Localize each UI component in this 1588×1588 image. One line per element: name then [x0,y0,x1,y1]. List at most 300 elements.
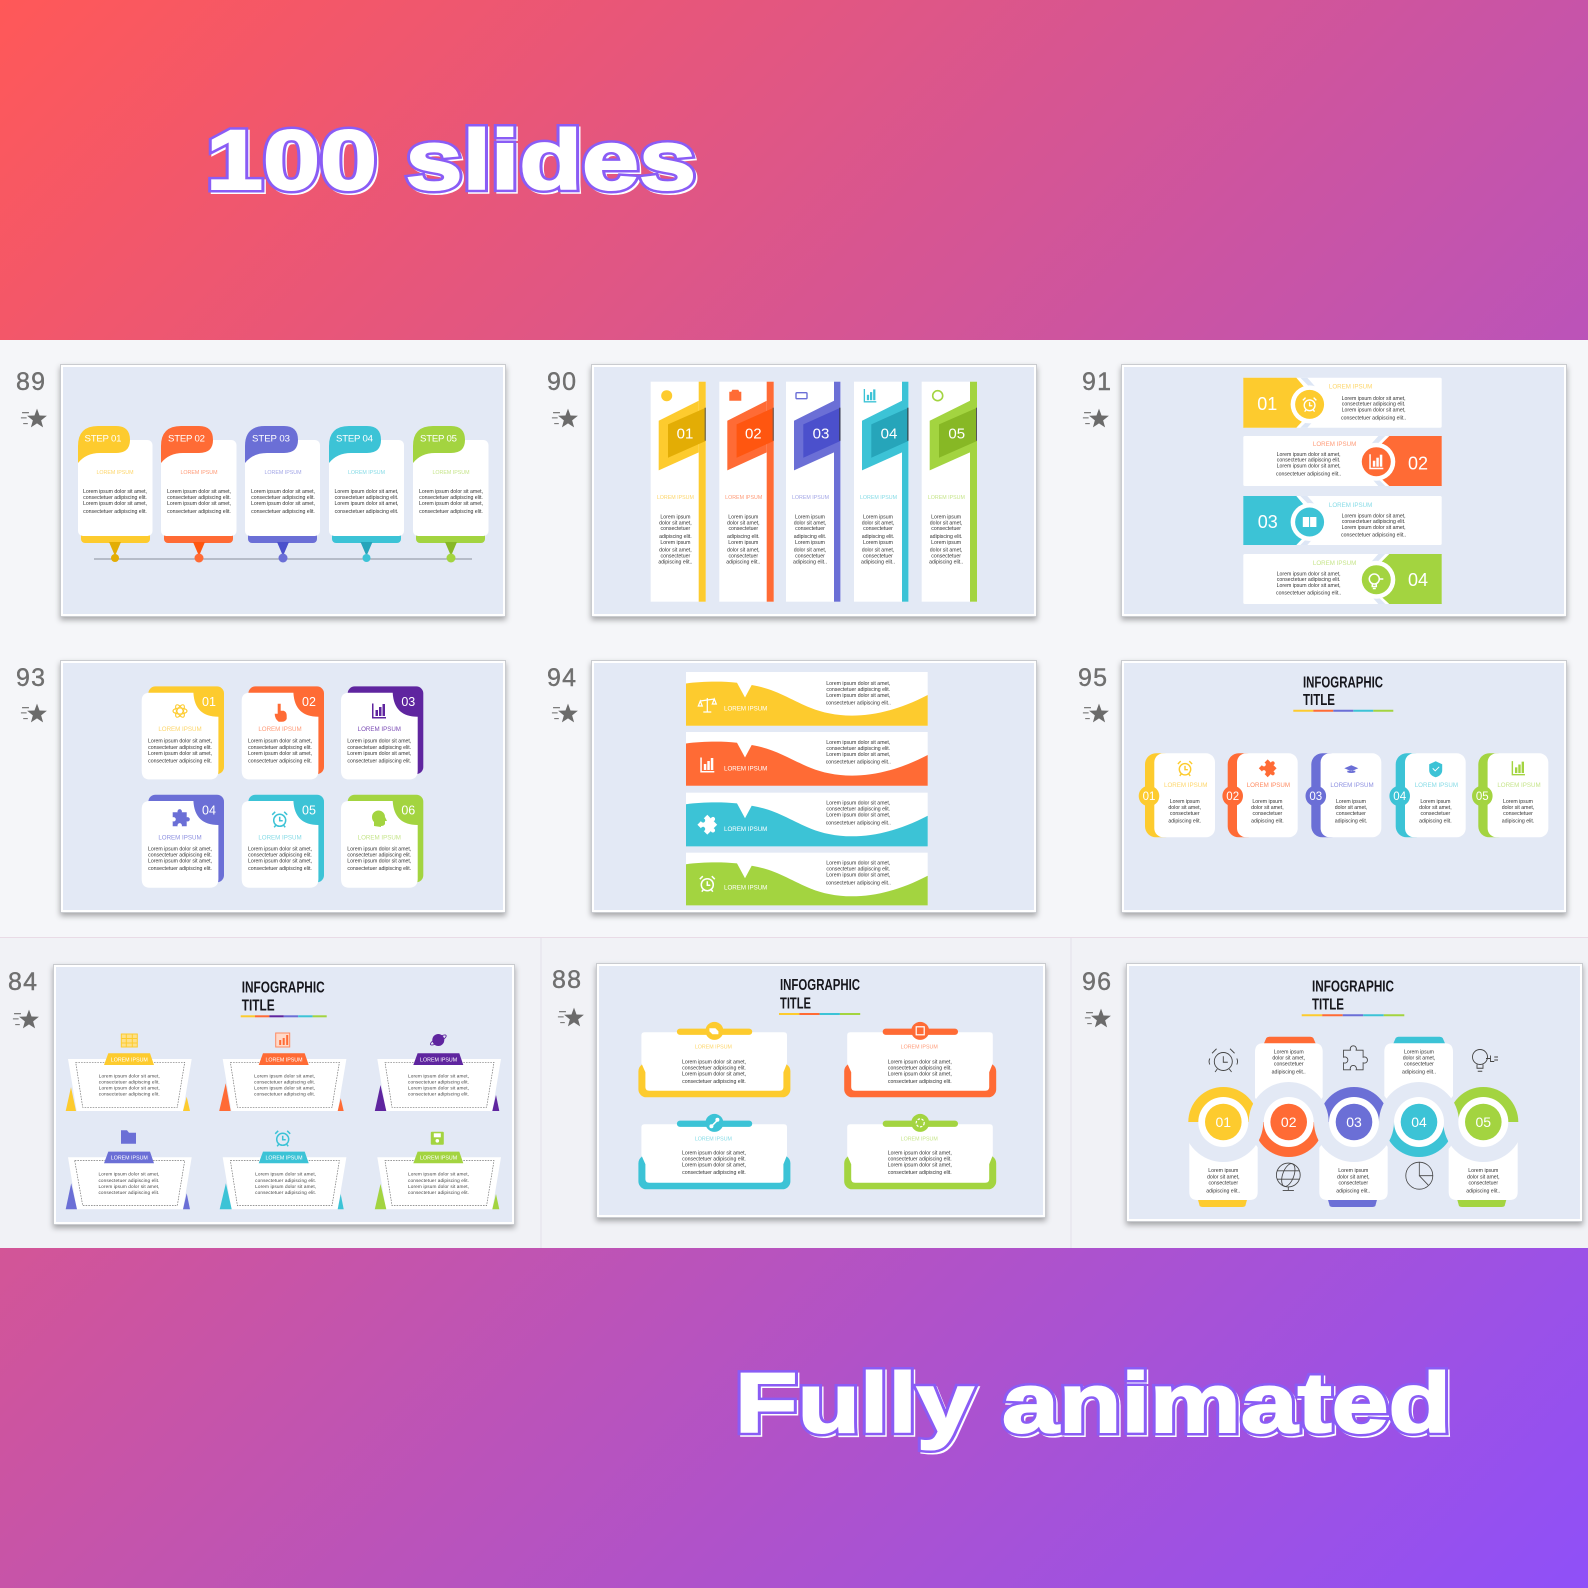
banner teal: consectetuer adipiscing elit. [826,807,890,813]
card violet: consectetuer adipiscing elit. [98,1178,160,1183]
banner green: consectetuer adipiscing elit. [826,867,890,873]
column 01: Lorem ipsum [660,540,690,546]
card: step 01: consectetuer adipiscing elit. [83,509,147,515]
icon: alarm clock [1209,1049,1238,1072]
card violet: Lorem ipsum dolor sit amet, [98,1172,160,1177]
card 02: 02 [1226,791,1239,803]
column 02 [719,382,774,602]
card 05 [242,795,324,888]
card 04: consectetuer adipiscing elit. [148,866,212,872]
text block 02: consectetuer [1274,1062,1304,1068]
card 02 [242,686,324,779]
column 04: 04 [881,425,897,442]
column 01: consectetuer [661,554,691,560]
card green: Lorem ipsum dolor sit amet, [888,1150,952,1156]
column 02: adipiscing elit.. [726,560,760,566]
card: step 02 [161,426,236,562]
card: step 01: consectetuer adipiscing elit. [83,495,147,501]
card 04: Lorem ipsum [1420,799,1450,805]
card 01: dolor sit amet, [1168,805,1201,811]
card: step 04: Lorem ipsum dolor sit amet, [334,489,399,495]
row 03: Lorem ipsum dolor sit amet, [1342,525,1406,531]
row 03: LOREM IPSUM [1329,502,1372,509]
panel: slide 89 timeline steps [60,364,506,617]
card yellow: Lorem ipsum dolor sit amet, [99,1086,160,1091]
column 05: adipiscing elit.. [929,560,963,566]
card 04: LOREM IPSUM [1415,782,1458,789]
column 03: Lorem ipsum [795,540,825,546]
banner teal: LOREM IPSUM [724,826,767,833]
column 04: adipiscing elit.. [861,560,895,566]
card: step 05: Lorem ipsum dolor sit amet, [419,489,483,495]
slide number 96 with star [1082,968,1112,1027]
icon: pie chart [1406,1162,1433,1189]
banner teal: Lorem ipsum dolor sit amet, [826,801,890,807]
card green: Lorem ipsum dolor sit amet, [408,1172,469,1177]
banner orange: LOREM IPSUM [724,765,767,772]
card 04: Lorem ipsum dolor sit amet, [148,858,212,864]
card 02: consectetuer adipiscing elit. [248,759,312,765]
column 02: Lorem ipsum [728,514,758,520]
card: step 01: Lorem ipsum dolor sit amet, [83,501,147,507]
banner teal: consectetuer adipiscing elit.. [826,820,891,826]
card: step 01 [78,426,152,562]
row 02: Lorem ipsum dolor sit amet, [1277,452,1341,458]
card orange: consectetuer adipiscing elit. [888,1079,952,1085]
card: step 05: consectetuer adipiscing elit. [419,495,483,501]
column 01: 01 [677,425,693,442]
card 01: consectetuer adipiscing elit. [148,759,212,765]
column 03 [786,382,840,602]
banner yellow: LOREM IPSUM [724,705,767,712]
card: step 03: LOREM IPSUM [264,470,302,476]
card 05: consectetuer [1503,811,1533,817]
card orange: consectetuer adipiscing elit. [254,1092,315,1097]
row 04: LOREM IPSUM [1313,560,1356,567]
card 03: LOREM IPSUM [1330,782,1374,789]
card green: consectetuer adipiscing elit. [888,1170,952,1176]
card 05: LOREM IPSUM [258,834,302,841]
slide number 91 with star [1082,368,1112,427]
card 04: 04 [1393,791,1407,803]
card: step 02: Lorem ipsum dolor sit amet, [167,489,231,495]
column 01: adipiscing elit.. [658,560,692,566]
card 01: Lorem ipsum [1170,799,1200,805]
column 05: dolor sit amet, [930,548,962,554]
card 06: Lorem ipsum dolor sit amet, [347,858,411,864]
card 05: 05 [302,803,316,817]
card yellow [66,1034,192,1111]
column 04: adipiscing elit. [862,534,894,540]
card yellow: consectetuer adipiscing elit. [682,1065,746,1071]
card 03: Lorem ipsum [1336,799,1366,805]
text block 03: consectetuer [1338,1180,1368,1186]
text block 02: Lorem ipsum [1274,1049,1304,1055]
card: step 02: STEP 02 [168,434,205,444]
card: step 04: LOREM IPSUM [348,470,385,476]
banner orange [686,732,928,786]
card orange: Lorem ipsum dolor sit amet, [254,1073,315,1078]
panel: slide 95 five numbered cards [1121,660,1567,913]
card: step 04 [329,426,404,562]
row 04: Lorem ipsum dolor sit amet, [1277,571,1341,577]
column 04: dolor sit amet, [862,520,894,526]
card 03: consectetuer [1336,811,1366,817]
column 02: consectetuer [728,526,758,532]
card 02: dolor sit amet, [1251,805,1284,811]
column 05: dolor sit amet, [930,520,962,526]
card 01: Lorem ipsum dolor sit amet, [148,751,212,757]
card violet: Lorem ipsum dolor sit amet, [98,1184,160,1189]
column 05: Lorem ipsum [931,514,961,520]
heading: 100 slides: 100 slides [208,115,698,209]
card 03: Lorem ipsum dolor sit amet, [347,739,411,745]
circle 03 [1329,1097,1379,1147]
row 03: 03 [1258,512,1278,532]
banner yellow: Lorem ipsum dolor sit amet, [826,693,890,699]
column 04: consectetuer [863,554,893,560]
card orange: consectetuer adipiscing elit. [888,1065,952,1071]
card 01 [142,686,224,779]
middle light background [0,340,1588,1248]
card 03 [341,686,423,779]
text block 05: dolor sit amet, [1467,1174,1500,1180]
slide number 95 with star [1078,664,1109,722]
heading: Fully animated: Fully animated [735,1356,1451,1450]
card 02: 02 [302,695,316,709]
row 04: Lorem ipsum dolor sit amet, [1277,583,1341,589]
column 01: Lorem ipsum [660,514,690,520]
card green: LOREM IPSUM [901,1136,938,1142]
row 02: Lorem ipsum dolor sit amet, [1277,464,1341,470]
title: INFOGRAPHIC [780,977,860,994]
card green: consectetuer adipiscing elit. [408,1178,469,1183]
card yellow: consectetuer adipiscing elit. [99,1080,160,1085]
card 03: LOREM IPSUM [358,726,401,733]
card orange: Lorem ipsum dolor sit amet, [888,1059,952,1065]
row 02: LOREM IPSUM [1313,441,1356,448]
card teal: Lorem ipsum dolor sit amet, [682,1150,746,1156]
slide number 88 with star [552,966,584,1026]
banner orange: consectetuer adipiscing elit. [826,746,890,752]
column 01: dolor sit amet, [659,520,692,526]
row 02: consectetuer adipiscing elit. [1277,458,1340,464]
panel: slide 90 flag columns [591,364,1037,617]
slide number 91 with star: 91 [1082,368,1112,396]
card yellow: Lorem ipsum dolor sit amet, [682,1059,746,1065]
circle 02: 02 [1281,1114,1297,1130]
card 01: 01 [1143,791,1155,803]
row 04: consectetuer adipiscing elit.. [1276,591,1341,597]
card teal: consectetuer adipiscing elit. [682,1156,746,1162]
bottom gradient banner [0,1248,1588,1588]
card 03: 03 [1309,791,1322,803]
card 02: LOREM IPSUM [1247,782,1290,789]
coloured half rings [1188,1087,1518,1157]
banner yellow: consectetuer adipiscing elit. [826,687,890,693]
background circles [1183,1082,1523,1162]
card orange: LOREM IPSUM [901,1044,938,1050]
panel: slide 91 arrow rows [1121,364,1567,617]
slide number 90 with star [547,368,578,427]
banner green: consectetuer adipiscing elit.. [826,880,891,886]
column 02: adipiscing elit. [727,534,760,540]
card 04 [1389,753,1466,837]
column 04 [854,382,908,602]
circle 05: 05 [1476,1114,1491,1130]
slide number 90 with star: 90 [547,368,577,396]
title [1303,675,1383,709]
card 01: LOREM IPSUM [158,726,202,733]
column 04: LOREM IPSUM [860,495,897,501]
card: step 05 [413,426,488,562]
row 01 [1243,378,1442,428]
card: step 04: STEP 04 [336,434,374,444]
row 02: 02 [1408,454,1428,474]
card: step 02: Lorem ipsum dolor sit amet, [167,501,231,507]
slide number 89 with star: 89 [16,368,46,396]
circle 05 [1458,1097,1508,1147]
banner orange: consectetuer adipiscing elit.. [826,760,891,766]
card 04: consectetuer [1421,811,1451,817]
card 04: consectetuer adipiscing elit. [148,852,212,858]
circle 01 [1198,1097,1248,1147]
text block 02: adipiscing elit.. [1272,1070,1306,1076]
text block 04: dolor sit amet, [1403,1055,1435,1061]
circle 03: 03 [1346,1114,1362,1130]
heading: Fully animated: Fully animated [735,1356,1451,1450]
row 02 [1243,436,1442,486]
circle 02 [1264,1097,1314,1147]
column 02: dolor sit amet, [727,548,760,554]
card yellow: Lorem ipsum dolor sit amet, [99,1073,160,1078]
column 03: Lorem ipsum [795,514,825,520]
card teal: LOREM IPSUM [265,1156,303,1162]
card teal: consectetuer adipiscing elit. [255,1190,316,1195]
banner green: Lorem ipsum dolor sit amet, [826,873,890,879]
card yellow [638,1022,790,1097]
card violet: LOREM IPSUM [111,1156,148,1162]
panel: slide 93 six cards [60,660,506,913]
panel: slide 94 wave banners [591,660,1037,913]
card green [375,1132,501,1209]
column 03: dolor sit amet, [794,548,826,554]
column 05: consectetuer [931,554,961,560]
card green: LOREM IPSUM [420,1156,457,1162]
card: step 05: consectetuer adipiscing elit. [419,509,483,515]
banner teal: Lorem ipsum dolor sit amet, [826,813,890,819]
column 03: consectetuer [795,554,825,560]
heading: 100 slides: 100 slides [206,113,696,207]
text block 05: Lorem ipsum [1468,1168,1498,1174]
text block 05: consectetuer [1468,1180,1498,1186]
card 01: consectetuer [1170,811,1200,817]
card 02: consectetuer [1253,811,1283,817]
card 06 [341,795,423,888]
title: TITLE [1312,996,1344,1013]
card 02: Lorem ipsum dolor sit amet, [248,751,312,757]
card 05 [1472,753,1548,837]
card: step 03: consectetuer adipiscing elit. [251,495,315,501]
column 02: LOREM IPSUM [725,495,762,501]
card: step 04: consectetuer adipiscing elit. [335,495,398,501]
circle 01: 01 [1216,1114,1231,1130]
icon: puzzle [1344,1046,1367,1070]
card 02: Lorem ipsum dolor sit amet, [248,739,312,745]
row 04: consectetuer adipiscing elit. [1277,577,1340,583]
column 03: dolor sit amet, [794,520,826,526]
card 02: consectetuer adipiscing elit. [248,745,312,751]
card orange [219,1033,346,1111]
banner yellow: Lorem ipsum dolor sit amet, [826,681,890,687]
card teal [638,1114,790,1189]
banner yellow: consectetuer adipiscing elit.. [826,701,891,707]
row 04: 04 [1408,570,1428,590]
card: step 02: consectetuer adipiscing elit. [167,509,231,515]
card violet: consectetuer adipiscing elit. [98,1190,160,1195]
card 02 [1222,753,1298,837]
panel: slide 96 snake circles [1126,963,1583,1222]
card 05: Lorem ipsum dolor sit amet, [248,846,312,852]
text block 01: dolor sit amet, [1207,1174,1240,1180]
banner yellow [686,672,928,726]
card teal: consectetuer adipiscing elit. [255,1178,316,1183]
card: step 02: consectetuer adipiscing elit. [167,495,231,501]
card: step 04: consectetuer adipiscing elit. [335,509,398,515]
card 06: LOREM IPSUM [358,834,401,841]
column 05: consectetuer [931,526,961,532]
banner orange: Lorem ipsum dolor sit amet, [826,740,890,746]
card green: consectetuer adipiscing elit. [408,1190,469,1195]
card 03: dolor sit amet, [1335,805,1367,811]
card 04: 04 [202,803,216,817]
card: step 01: STEP 01 [84,434,122,444]
circle 04: 04 [1411,1114,1427,1130]
row 01: consectetuer adipiscing elit. [1342,402,1405,408]
column 05: adipiscing elit. [930,534,962,540]
card 05: LOREM IPSUM [1497,782,1541,789]
card: step 03 [245,426,320,562]
card teal: Lorem ipsum dolor sit amet, [255,1184,316,1189]
card purple: Lorem ipsum dolor sit amet, [408,1086,469,1091]
column 05: LOREM IPSUM [928,495,965,501]
card purple: consectetuer adipiscing elit. [408,1092,469,1097]
card 03: consectetuer adipiscing elit. [347,759,411,765]
card 06: consectetuer adipiscing elit. [347,852,411,858]
card: step 05: Lorem ipsum dolor sit amet, [419,501,483,507]
card 06: consectetuer adipiscing elit. [347,866,411,872]
row 01: Lorem ipsum dolor sit amet, [1342,408,1406,414]
slide number 89 with star [16,368,47,427]
column 02: 02 [745,425,762,442]
column 03: adipiscing elit.. [793,560,827,566]
column 04: Lorem ipsum [863,514,893,520]
row 04 [1243,554,1442,604]
card teal [220,1131,346,1209]
title: INFOGRAPHIC [1303,675,1383,692]
slide number 84 with star: 84 [8,968,38,996]
slide number 94 with star [547,664,578,722]
card: step 04: Lorem ipsum dolor sit amet, [334,501,399,507]
card yellow: LOREM IPSUM [695,1044,732,1050]
banner green: Lorem ipsum dolor sit amet, [826,861,890,867]
slide number 88 with star: 88 [552,966,582,994]
card 02: Lorem ipsum [1252,799,1282,805]
card 05: 05 [1476,791,1489,803]
text block 04: consectetuer [1404,1062,1434,1068]
card: step 01: LOREM IPSUM [96,470,134,476]
card green [844,1114,996,1189]
card yellow: consectetuer adipiscing elit. [99,1092,160,1097]
text block 02: dolor sit amet, [1272,1055,1305,1061]
card yellow: Lorem ipsum dolor sit amet, [682,1071,746,1077]
column 05 [922,382,977,602]
card teal: Lorem ipsum dolor sit amet, [682,1162,746,1168]
slide number 96 with star: 96 [1082,968,1112,996]
card 05: Lorem ipsum [1503,799,1533,805]
text block 03: Lorem ipsum [1338,1168,1368,1174]
card: step 05: STEP 05 [420,434,457,444]
row 01: LOREM IPSUM [1329,384,1372,391]
row 03: consectetuer adipiscing elit. [1342,519,1405,525]
banner green: LOREM IPSUM [724,885,767,892]
row 01: consectetuer adipiscing elit.. [1341,415,1406,421]
column 01 [651,382,706,602]
column 01: consectetuer [661,526,691,532]
card 05: dolor sit amet, [1502,805,1534,811]
card orange [844,1022,996,1097]
card purple [375,1033,501,1111]
text block 04: Lorem ipsum [1404,1049,1434,1055]
card 03 [1306,753,1381,837]
card 01: LOREM IPSUM [1164,782,1207,789]
icon: light bulb [1472,1050,1498,1071]
card: step 03: STEP 03 [252,434,290,444]
row 01: 01 [1257,394,1277,414]
title [1312,979,1394,1013]
slide number 93 with star: 93 [16,664,46,692]
card orange: Lorem ipsum dolor sit amet, [888,1071,952,1077]
text block 01: consectetuer [1208,1180,1238,1186]
row 02: consectetuer adipiscing elit.. [1276,471,1341,477]
slide number 95 with star: 95 [1078,664,1108,692]
row 01: Lorem ipsum dolor sit amet, [1342,396,1406,402]
title: TITLE [780,995,811,1012]
column 02: dolor sit amet, [727,520,760,526]
top gradient banner [0,0,1588,340]
slide number 94 with star: 94 [547,664,577,692]
text block 03: dolor sit amet, [1337,1174,1370,1180]
card: step 05: LOREM IPSUM [432,470,470,476]
card 04 [142,795,224,888]
card 01: adipiscing elit. [1168,819,1201,825]
white cards and colour tabs [1189,1037,1518,1207]
row 03 [1243,496,1442,545]
card 01 [1139,753,1215,837]
card violet [66,1130,192,1209]
text block 01: adipiscing elit.. [1206,1188,1240,1194]
title: TITLE [242,998,275,1015]
column 04: consectetuer [863,526,893,532]
panel: slide 88 four cards [596,963,1046,1218]
card 06: Lorem ipsum dolor sit amet, [347,846,411,852]
text block 05: adipiscing elit.. [1466,1188,1500,1194]
card orange: consectetuer adipiscing elit. [254,1080,315,1085]
card teal: LOREM IPSUM [695,1136,732,1142]
slide number 93 with star [16,664,47,722]
column 02: consectetuer [728,554,758,560]
card yellow: LOREM IPSUM [111,1057,148,1063]
